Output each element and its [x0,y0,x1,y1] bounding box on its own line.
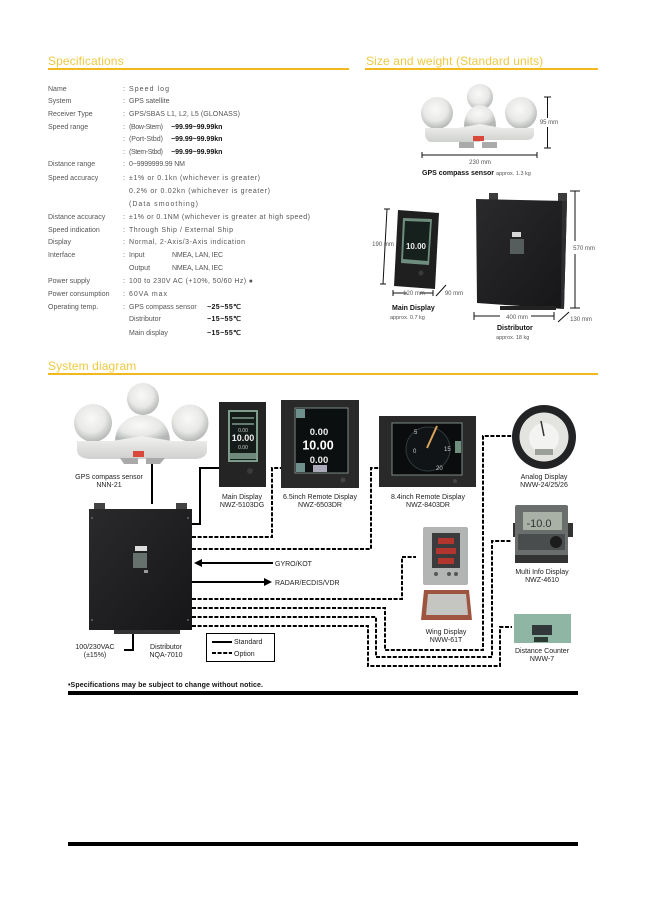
label: main display: NWZ-5103DG [220,502,264,509]
connection: sensor to distributor [151,462,153,504]
main display [219,402,266,487]
specifications table: −99.99~99.99kn [171,149,222,156]
label: GPS compass sensor [75,474,144,489]
6.5 inch remote display: 0.00 [310,455,328,466]
distributor photo with dimensions: 130 mm [570,317,592,323]
specifications table: ±1% or 0.1NM (whichever is greater at high speed) [129,214,310,221]
GPS compass sensor photo with dimensions: 230 mm [469,160,491,166]
analog display [512,405,576,469]
8.4 inch remote display: 0 [413,449,417,455]
specifications table: 100 to 230V AC (+10%, 50/60 Hz) ● [129,278,253,285]
arrow: gyro/log input [194,559,273,567]
connection: distributor to main display [192,468,219,524]
caption: distributor: Distributor [497,325,533,332]
label: 8.4 inch remote display: 8.4inch Remote Display [391,494,465,501]
specifications table: 0~9999999.99 NM [129,161,185,168]
label: GPS compass sensor: NNN-21 [96,482,122,489]
specifications table: : [123,227,125,234]
label: multi info display: NWZ-4610 [525,577,559,584]
label: power supply [75,644,115,659]
label: power supply: 100/230VAC [75,644,115,651]
label: distributor [149,644,183,659]
specifications table: (Stern-Stbd) [129,149,163,156]
specifications table: Operating temp. [48,304,98,311]
specifications table: : [123,86,125,93]
specifications table: : [123,291,125,298]
caption: distributor: approx. 18 kg [496,335,529,341]
8.4 inch remote display: 20 [436,466,443,472]
specifications table: : [123,98,125,105]
label: main display [220,494,264,509]
specifications table: Through Ship / External Ship [129,227,233,234]
label: main display: Main Display [222,494,263,501]
specifications table: : [123,136,125,143]
specifications table [48,86,310,337]
distributor photo with dimensions: 400 mm [506,315,528,321]
specifications table: System [48,98,72,105]
specifications table: Interface [48,252,75,259]
main display photo with dimensions: 90 mm [445,291,463,297]
label: 6.5 inch remote display: 6.5inch Remote Display [283,494,357,501]
label: 8.4 inch remote display [391,494,465,509]
heading: size and weight: Size and weight (Standard units) [366,54,543,68]
main display: 0.00 [238,428,248,434]
specifications table: GPS satellite [129,98,170,105]
specifications table: Speed indication [48,227,100,234]
label: distance counter [515,648,570,663]
heading: specifications: Specifications [48,54,124,68]
specifications table: : [123,252,125,259]
specifications table: : [123,111,125,118]
label: 6.5 inch remote display [283,494,357,509]
label: wing display: Wing Display [426,629,467,636]
label: analog display [520,474,568,489]
specifications table: : [123,124,125,131]
main display photo with dimensions: 10.00 [406,242,427,251]
main display photo with dimensions: 120 mm [403,291,425,297]
specifications table: Distributor [129,316,162,323]
label: 8.4 inch remote display: NWZ-8403DR [406,502,450,509]
specifications table: NMEA, LAN, IEC [172,265,223,272]
specifications table: Output [129,265,150,272]
GPS compass sensor photo with dimensions: 95 mm [540,120,558,126]
specifications table: Normal, 2-Axis/3-Axis indication [129,239,245,246]
specifications table: −99.99~99.99kn [171,124,222,131]
label: power supply: (±15%) [84,652,106,659]
specifications table: (Port-Stbd) [129,136,163,143]
specifications table: ±1% or 0.1kn (whichever is greater) [129,175,260,182]
caption: main display: approx. 0.7 kg [390,315,425,321]
specifications table: Display [48,239,71,246]
multi info display [513,505,573,563]
label: wing display [426,629,467,644]
main display: 0.00 [238,445,248,451]
specifications table: −15~55℃ [207,315,241,323]
main display photo with dimensions: 190 mm [372,242,394,248]
legend: Option [234,651,255,658]
connection: power input [124,634,133,650]
distributor cabinet [89,503,192,634]
6.5 inch remote display: 10.00 [302,438,334,452]
specifications table: Power supply [48,278,91,285]
connection: option to wing display [192,557,416,599]
top rule [68,691,578,695]
GPS compass sensor photo with dimensions [421,84,558,166]
legend: Standard [234,639,263,646]
specifications table: Speed log [129,86,169,93]
specifications table: Name [48,86,67,93]
specifications table: : [123,278,125,285]
footnote: •Specifications may be subject to change without notice. [68,682,263,689]
specifications table: GPS/SBAS L1, L2, L5 (GLONASS) [129,111,240,118]
specifications table: Power consumption [48,291,110,298]
8.4 inch remote display: 15 [444,447,451,453]
label: distributor: Distributor [150,644,183,651]
specifications table: Main display [129,330,168,337]
label: distance counter: NWW-7 [530,656,554,663]
specifications table: Receiver Type [48,111,93,118]
specifications table: 0.2% or 0.02kn (whichever is greater) [129,188,270,195]
main display: 10.00 [232,433,254,443]
specifications table: Speed range [48,124,88,131]
specifications table: : [123,239,125,246]
wing display [421,527,472,620]
specifications table: Distance accuracy [48,214,106,221]
caption: main display [390,305,435,321]
label: wing display: NWW-61T [430,637,463,644]
distributor photo with dimensions: 570 mm [573,246,595,252]
distributor photo with dimensions [474,191,595,323]
arrow: radar output [192,578,272,586]
label: multi info display: Multi Info Display [515,569,569,576]
6.5 inch remote display: 0.00 [310,427,328,438]
6.5 inch remote display [281,400,359,488]
label: radar output: RADAR/ECDIS/VDR [275,580,340,587]
label: analog display: NWW-24/25/26 [520,482,568,489]
specifications table: (Bow-Stern) [129,124,163,131]
specifications table: Speed accuracy [48,175,99,182]
label: analog display: Analog Display [521,474,568,481]
heading: system diagram: System diagram [48,359,136,373]
connection: option to multi info display [192,541,512,657]
connection: option to analog display [192,436,513,650]
specifications table: : [123,161,125,168]
caption: distributor [496,325,533,341]
specifications table: : [123,304,125,311]
multi info display: -10.0 [526,518,552,530]
label: GPS compass sensor: GPS compass sensor [75,474,144,481]
label: distance counter: Distance Counter [515,648,570,655]
caption: main display: Main Display [392,305,435,312]
specifications table: 60VA max [129,291,168,298]
label: gyro input: GYRO/KOT [275,561,313,568]
specifications table: : [123,149,125,156]
specifications table: : [123,214,125,221]
specifications table: −99.99~99.99kn [171,136,222,143]
specifications table: Input [129,252,145,259]
bottom rule [68,842,578,846]
label: multi info display [515,569,569,584]
connection: option to 6.5 inch remote display [192,468,281,537]
caption: GPS compass sensor: GPS compass sensor approx. 1.3 kg [422,170,531,177]
specifications table: (Data smoothing) [129,201,198,208]
connection: option to 8.4 inch remote display [192,468,379,549]
8.4 inch remote display [379,416,476,487]
label: 6.5 inch remote display: NWZ-6503DR [298,502,342,509]
specifications table: −15~55℃ [207,329,241,337]
label: distributor: NQA-7010 [149,652,183,659]
connection: option to distance counter [192,626,512,666]
legend [206,634,274,662]
specifications table: NMEA, LAN, IEC [172,252,223,259]
specifications table: : [123,175,125,182]
distance counter [514,614,571,643]
specifications table: −25~55℃ [207,303,241,311]
specifications table: GPS compass sensor [129,304,197,311]
main display photo with dimensions [372,209,463,297]
8.4 inch remote display: 5 [414,430,418,436]
GPS compass sensor [74,383,208,464]
specifications table: Distance range [48,161,95,168]
